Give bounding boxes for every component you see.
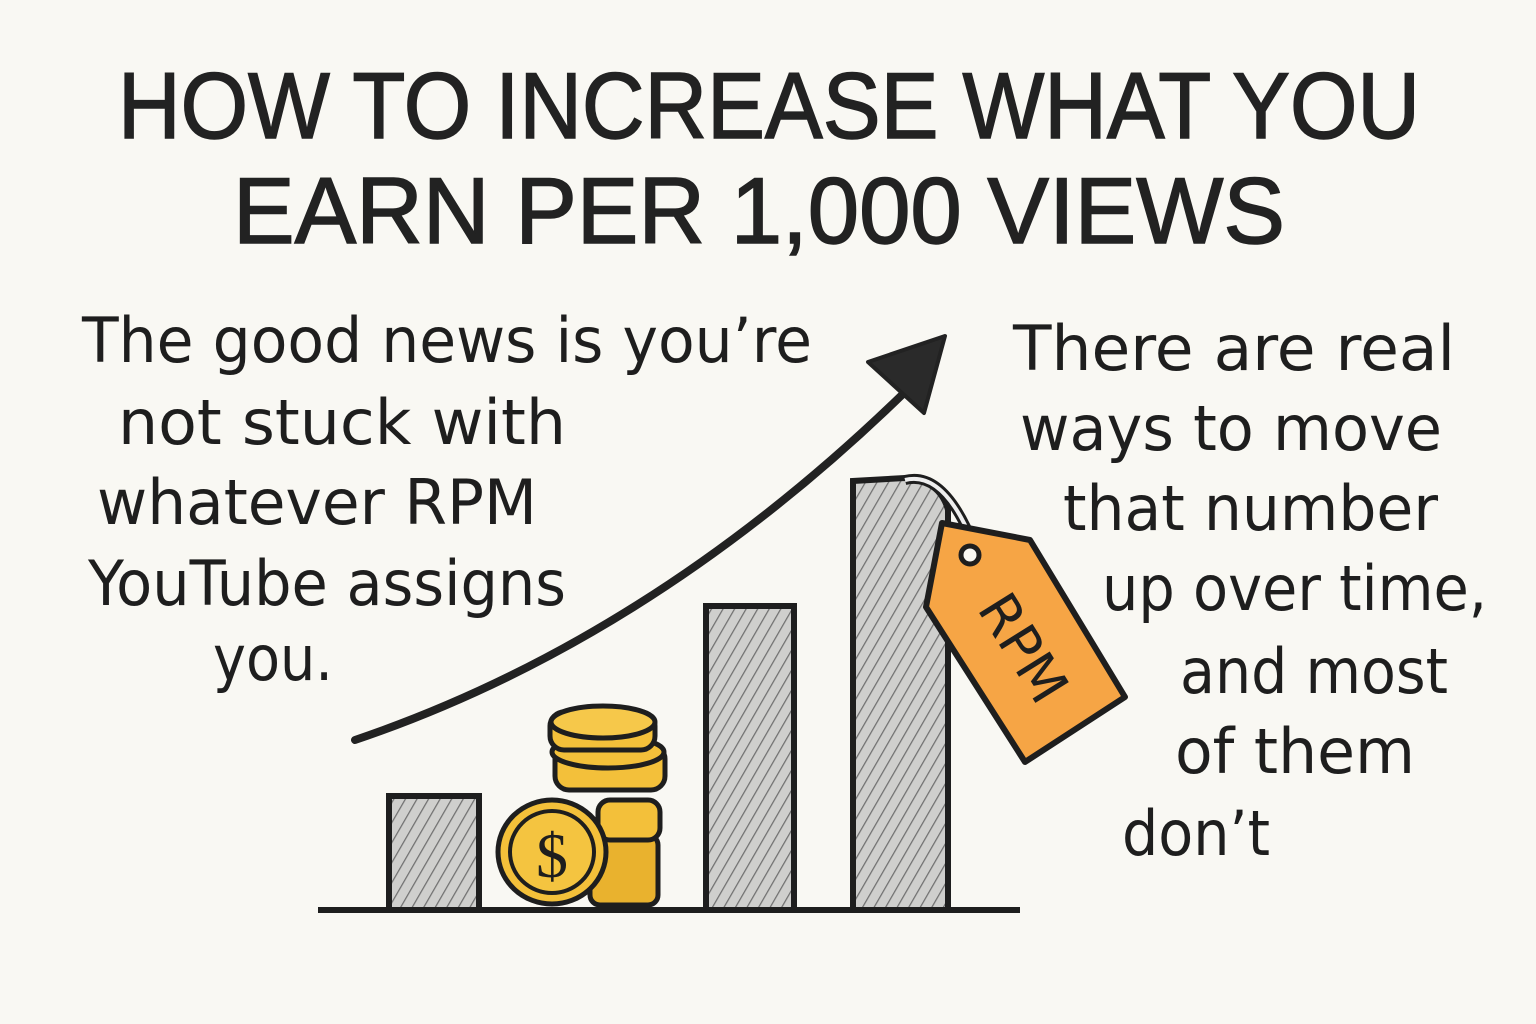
bar chart <box>318 478 1020 910</box>
left text block <box>81 304 812 695</box>
right text block <box>1012 312 1487 870</box>
bar 3 <box>853 478 948 910</box>
right text block: There are real <box>1012 312 1455 385</box>
left text block: YouTube assigns <box>87 547 566 620</box>
arrow: growth <box>355 336 945 740</box>
title <box>118 53 1420 263</box>
title: EARN PER 1,000 VIEWS <box>233 158 1285 263</box>
right text block: that number <box>1063 472 1438 545</box>
baseline <box>318 907 1020 913</box>
right text block: of them <box>1175 715 1415 788</box>
icon: RPM price tag: RPM <box>965 582 1081 714</box>
right text block: don’t <box>1122 797 1270 870</box>
bar 1 <box>389 796 479 910</box>
right text block: up over time, <box>1102 552 1487 625</box>
right text block: ways to move <box>1020 392 1442 465</box>
right text block: and most <box>1180 635 1448 708</box>
left text block: you. <box>213 622 333 695</box>
icon: RPM price tag <box>905 479 1125 762</box>
left text block: The good news is you’re <box>81 304 812 377</box>
icon: dollar coin <box>498 800 606 904</box>
bar 2 <box>706 606 794 910</box>
left text block: whatever RPM <box>97 466 537 539</box>
left text block: not stuck with <box>118 386 566 459</box>
icon: coin stack <box>498 706 665 905</box>
title: HOW TO INCREASE WHAT YOU <box>118 53 1420 158</box>
icon: dollar coin: $ <box>536 820 568 891</box>
